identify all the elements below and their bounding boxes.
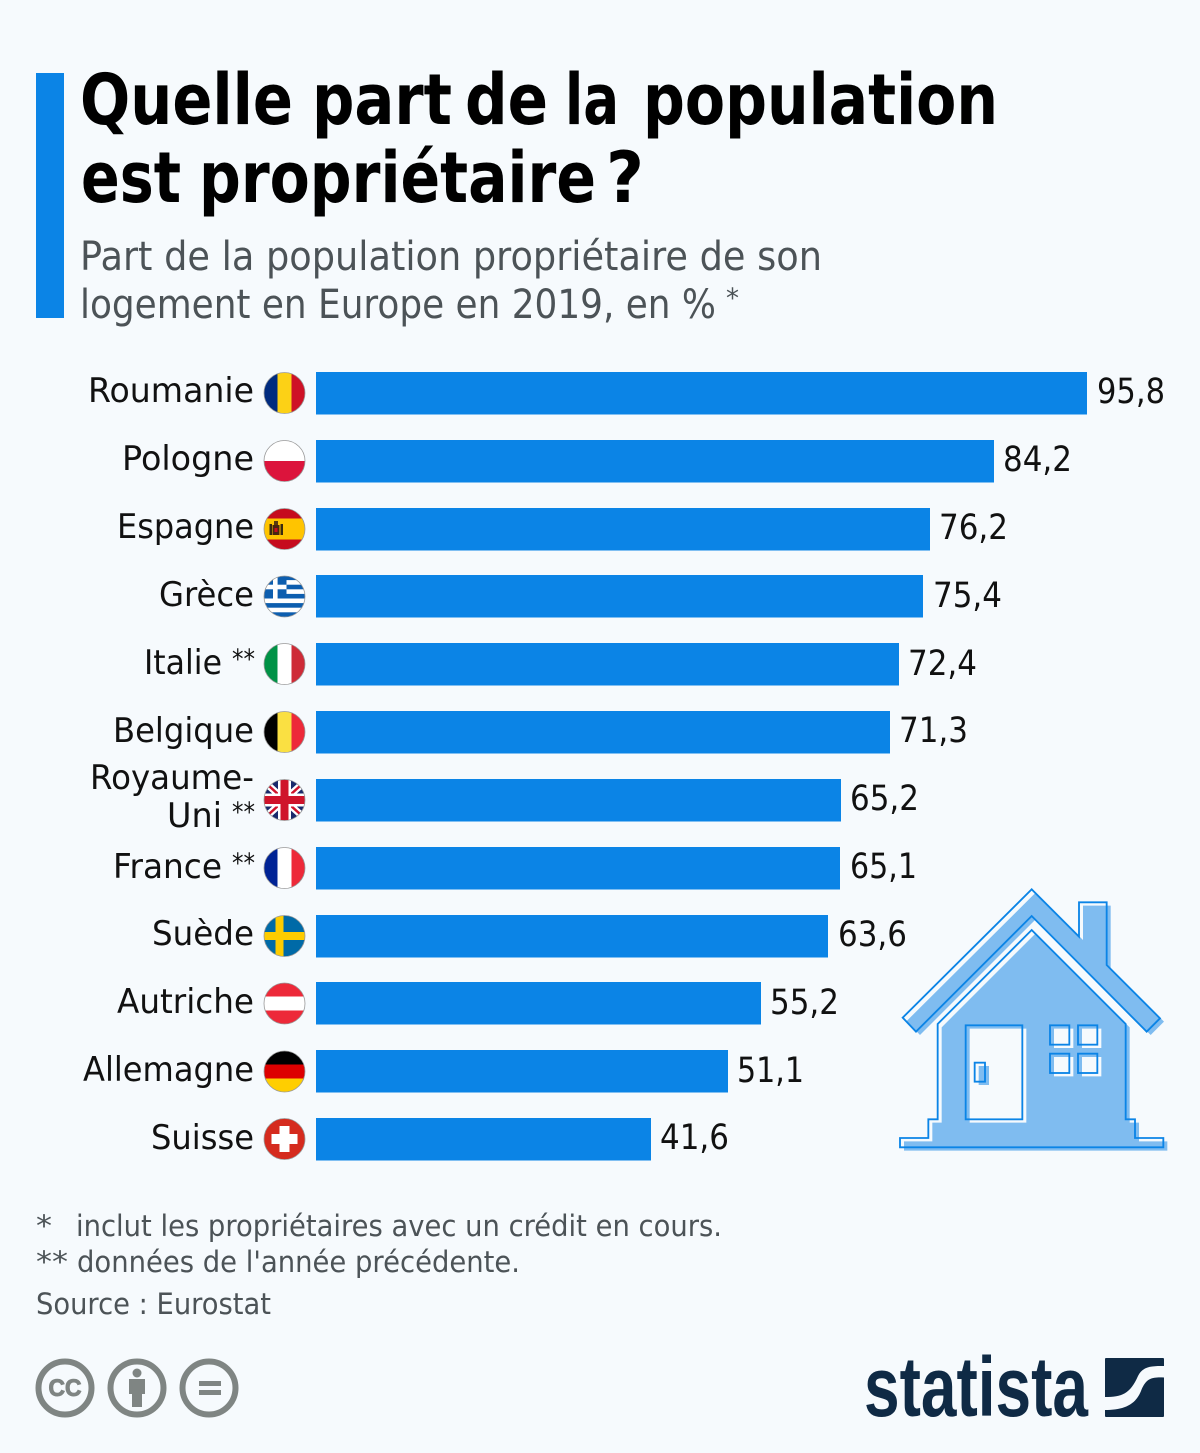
row: France: 65,1	[850, 847, 917, 887]
row: Autriche: 55,2	[770, 983, 839, 1023]
title: ?	[606, 137, 644, 219]
icon: house	[900, 889, 1167, 1151]
row: Italie: Italie	[144, 643, 222, 683]
row: Espagne: 76,2	[939, 508, 1008, 548]
subtitle	[80, 234, 822, 328]
row: Suisse: Suisse	[151, 1118, 254, 1158]
title: population	[643, 59, 998, 141]
row: Pologne	[122, 439, 1072, 482]
row: Allemagne: Allemagne	[83, 1050, 254, 1090]
row: Italie: **	[232, 644, 255, 675]
row: Autriche: Autriche	[117, 982, 254, 1022]
row: Grèce	[159, 575, 1002, 618]
title: est	[81, 137, 181, 219]
row: Italie: 72,4	[908, 644, 977, 684]
icon: attribution	[110, 1362, 164, 1414]
row: Royaume-Uni	[93, 764, 916, 828]
row: Royaume-Uni: 65,2	[850, 779, 919, 819]
icon: creative commons	[38, 1362, 92, 1414]
title: propriétaire	[199, 137, 596, 219]
row: Royaume-Uni: Royaume-	[90, 758, 254, 798]
icon: no derivatives	[182, 1362, 236, 1414]
row: Grèce: 75,4	[933, 576, 1002, 616]
row: Pologne: 84,2	[1003, 440, 1072, 480]
footnotes: *	[36, 1209, 52, 1243]
title: part	[312, 59, 452, 141]
row: Espagne	[117, 507, 1008, 550]
row: Grèce: Grèce	[159, 575, 254, 615]
footnotes: inclut les propriétaires avec un crédit en cours.	[76, 1209, 722, 1243]
icon: creative commons: CC	[48, 1375, 82, 1402]
title accent bar	[36, 73, 64, 318]
source: Source : Eurostat	[36, 1287, 271, 1321]
row: Belgique: Belgique	[113, 711, 254, 751]
row: Roumanie: 95,8	[1097, 372, 1165, 412]
footnotes	[36, 1209, 722, 1279]
title: de	[465, 59, 548, 141]
row: France: **	[232, 848, 255, 879]
row: Royaume-Uni: Uni	[167, 796, 222, 836]
row: Belgique: 71,3	[899, 711, 968, 751]
bar chart	[83, 371, 1165, 1160]
row: Belgique	[113, 711, 968, 754]
subtitle: *	[726, 283, 739, 314]
footnotes: **	[36, 1245, 68, 1279]
title: la	[565, 59, 619, 141]
row: Italie	[144, 643, 977, 686]
row: Autriche	[117, 982, 839, 1024]
subtitle: logement en Europe en 2019, en %	[80, 282, 716, 328]
row: Espagne: Espagne	[117, 507, 254, 547]
row: Suisse	[151, 1118, 729, 1160]
row: Pologne: Pologne	[122, 439, 254, 479]
row: Suisse: 41,6	[660, 1118, 729, 1158]
title: Quelle	[80, 59, 293, 141]
row: France: France	[113, 847, 222, 887]
row: Suède: 63,6	[838, 915, 907, 955]
subtitle: Part de la population propriétaire de son	[80, 234, 822, 280]
row: Suède: Suède	[152, 914, 254, 954]
row: France	[113, 847, 917, 890]
footnotes: données de l'année précédente.	[77, 1245, 520, 1279]
row: Allemagne	[83, 1050, 804, 1092]
row: Royaume-Uni: **	[232, 797, 255, 828]
title	[80, 59, 998, 219]
row: Suède	[152, 914, 907, 958]
row: Roumanie: Roumanie	[88, 371, 254, 411]
row: Allemagne: 51,1	[737, 1051, 804, 1091]
logo: statista: statista	[864, 1340, 1089, 1434]
row: Roumanie	[88, 371, 1165, 414]
